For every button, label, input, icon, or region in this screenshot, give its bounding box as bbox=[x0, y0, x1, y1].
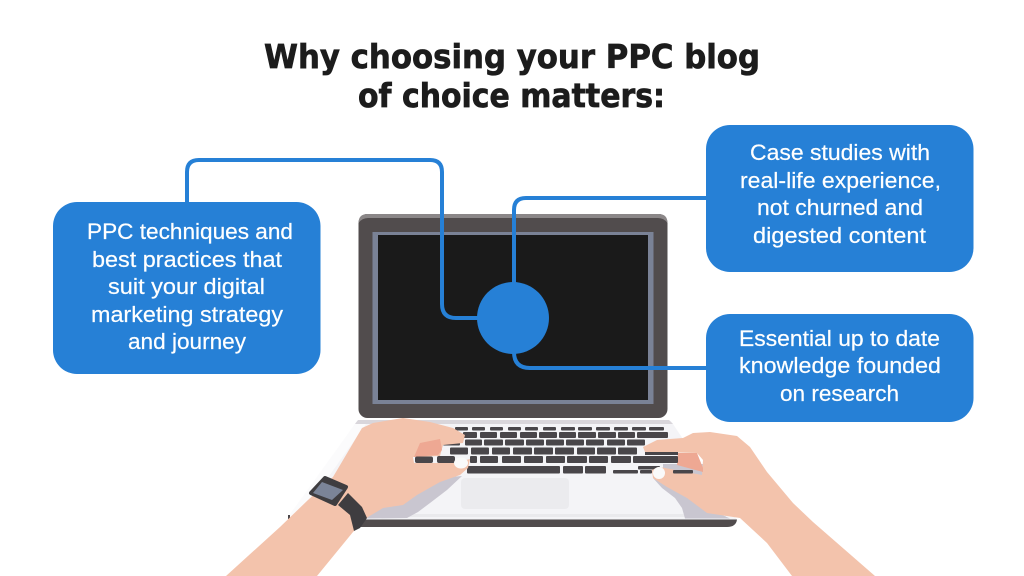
watch strap bbox=[338, 493, 367, 531]
callout: essential knowledge: Essential up to date bbox=[739, 326, 940, 351]
title: of choice matters: bbox=[358, 76, 665, 115]
hand shadow bbox=[653, 478, 730, 518]
callout: essential knowledge: knowledge founded bbox=[739, 353, 941, 378]
callout: PPC techniques bbox=[53, 202, 320, 374]
laptop base bbox=[288, 420, 737, 527]
right arm and hand bbox=[643, 432, 875, 576]
left hand with watch bbox=[226, 418, 470, 576]
callout: PPC techniques: marketing strategy bbox=[91, 302, 283, 327]
callout: case studies: real-life experience, bbox=[740, 168, 941, 193]
title: Why choosing your PPC blog bbox=[264, 37, 760, 76]
palm shade bbox=[677, 453, 703, 472]
connector lines bbox=[187, 160, 706, 368]
right hand bbox=[633, 432, 875, 576]
callout: case studies: not churned and bbox=[757, 195, 923, 220]
callout: PPC techniques: suit your digital bbox=[108, 274, 265, 299]
callout: case studies bbox=[706, 125, 974, 272]
thumb nail bbox=[653, 467, 665, 479]
watch face bbox=[311, 478, 346, 504]
thumb nail bbox=[454, 458, 468, 468]
hand shadow bbox=[366, 476, 462, 518]
callout: PPC techniques: and journey bbox=[128, 329, 246, 354]
laptop illustration bbox=[226, 214, 875, 576]
palm shade bbox=[414, 439, 442, 457]
left arm and hand bbox=[226, 418, 470, 576]
callout: essential knowledge bbox=[706, 314, 974, 422]
callout: case studies: Case studies with bbox=[750, 140, 930, 165]
callout: PPC techniques: best practices that bbox=[92, 247, 282, 272]
keyboard bbox=[347, 427, 668, 474]
title bbox=[264, 37, 760, 115]
central circle bbox=[477, 282, 549, 354]
laptop screen lid bbox=[358, 214, 668, 418]
callout: PPC techniques: PPC techniques and bbox=[87, 219, 293, 244]
callout: case studies: digested content bbox=[753, 223, 926, 248]
callout: essential knowledge: on research bbox=[780, 381, 899, 406]
